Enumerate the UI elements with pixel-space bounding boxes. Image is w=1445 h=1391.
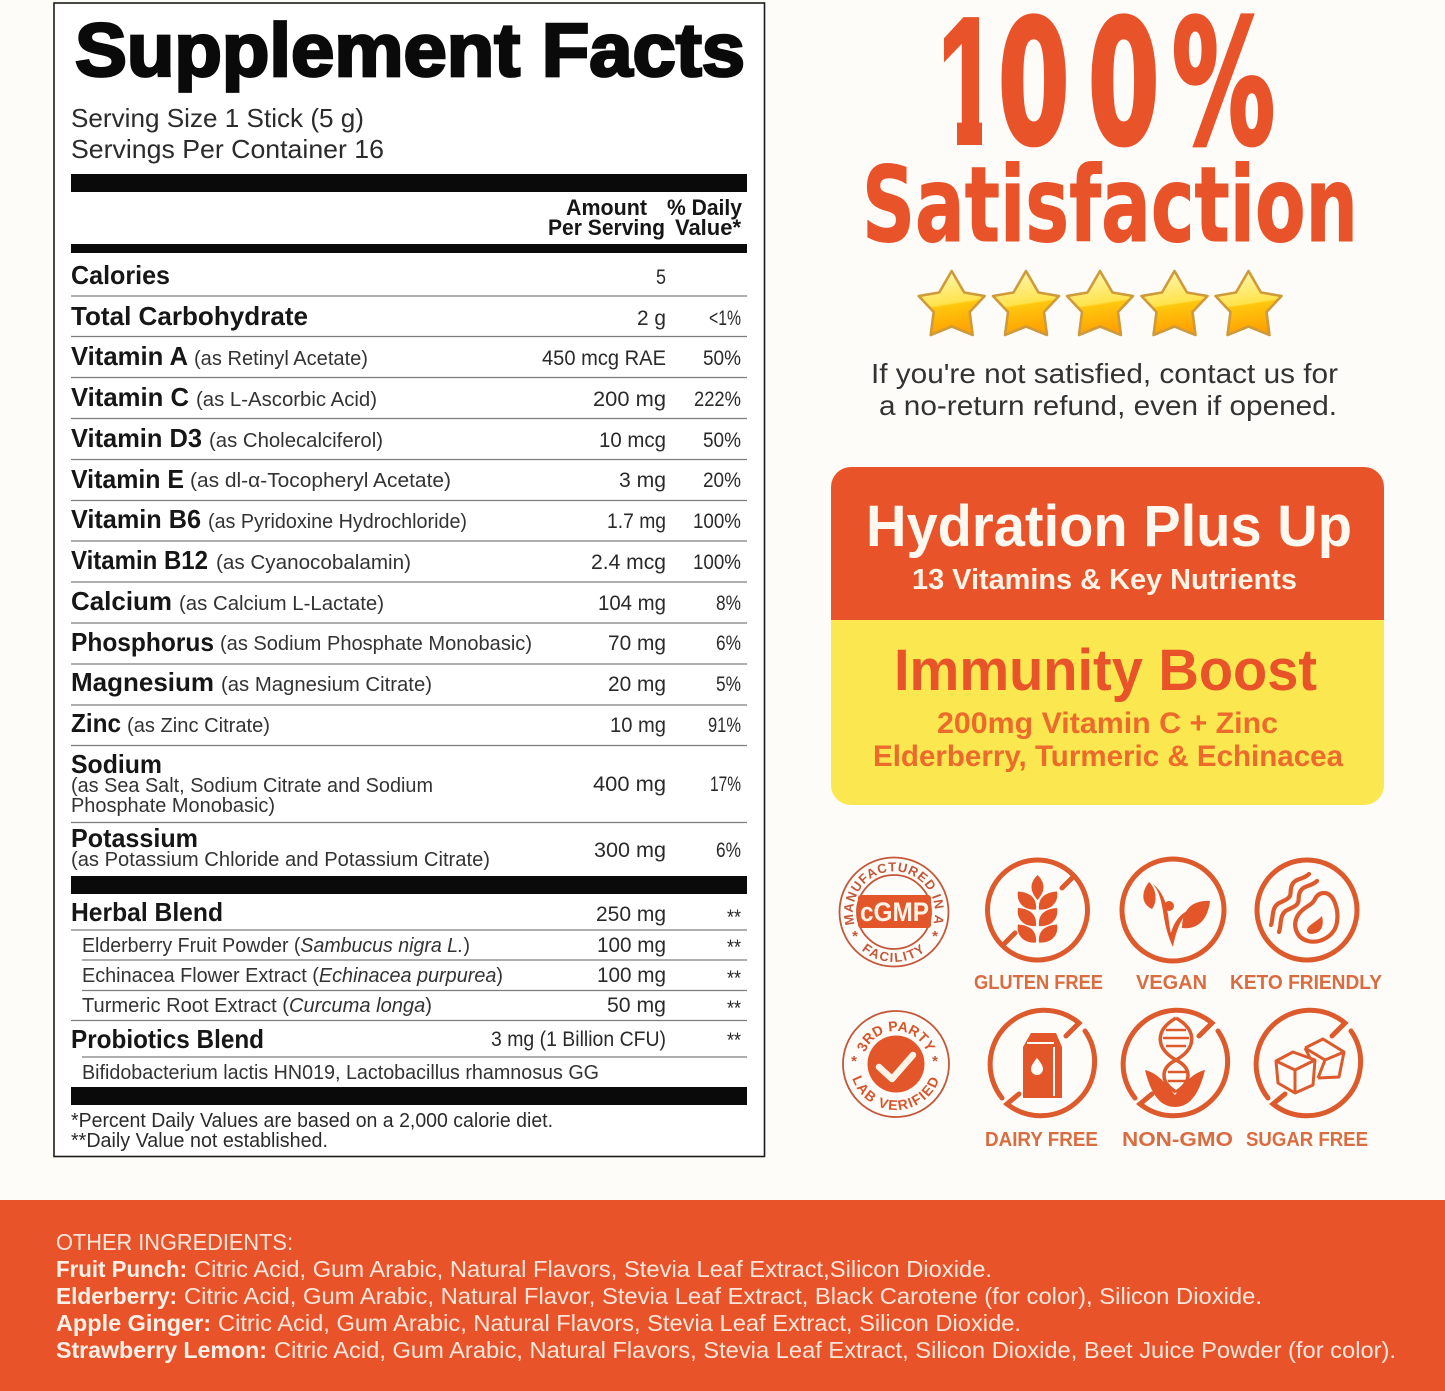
icon: cGMP badge: * [932, 928, 938, 945]
row: vitamin C [71, 382, 741, 412]
row: zinc: (as Zinc Citrate) [127, 715, 270, 737]
panel: supplement facts [54, 3, 764, 1156]
row: probiotics blend: ** [727, 1029, 741, 1052]
column headings: Per Serving [548, 215, 665, 240]
thick divider bar bottom [71, 1087, 747, 1105]
column headings: Amount [566, 195, 648, 220]
row: vitamin A: 50% [703, 347, 741, 370]
row: sodium: (as Sea Salt, Sodium Citrate and Sodium [71, 775, 433, 797]
row: calcium: 8% [716, 592, 741, 615]
ingredients: apple ginger: Apple Ginger: [56, 1310, 211, 1336]
row: sodium: Sodium [71, 749, 162, 779]
row: vitamin B12: 2.4 mcg [591, 551, 666, 574]
row: vitamin A: Vitamin A [71, 341, 188, 371]
thick divider bar header [71, 244, 747, 253]
row: phosphorus: (as Sodium Phosphate Monobasic) [220, 633, 532, 655]
row: vitamin C: (as L-Ascorbic Acid) [196, 389, 377, 411]
serving info [71, 103, 384, 164]
row: vitamin C: 222% [694, 388, 741, 411]
icon: gluten free [988, 860, 1088, 960]
card heading: Hydration Plus Up: Hydration Plus Up [866, 494, 1352, 559]
row: potassium: (as Potassium Chloride and Potassium Citrate) [71, 849, 490, 871]
row: vitamin E [71, 464, 741, 494]
badge labels: GLUTEN FREE [974, 972, 1103, 994]
ingredients: strawberry lemon: Citric Acid, Gum Arabic, Natural Flavors, Stevia Leaf Extract, Silicon Dioxide, Beet Juice Powder (for color). [274, 1337, 1396, 1363]
badge labels: VEGAN [1136, 972, 1207, 994]
card subheading: 13 Vitamins & Key Nutrients [912, 564, 1297, 596]
row: elderberry [82, 934, 741, 959]
row: probiotics blend: 3 mg (1 Billion CFU) [491, 1028, 666, 1051]
row: total carbohydrate [71, 301, 741, 331]
row: potassium: Potassium [71, 823, 198, 853]
row: herbal blend [71, 897, 741, 929]
icon: third party lab verified badge: 3RD PARTY [857, 1021, 936, 1052]
row: total carbohydrate: Total Carbohydrate [71, 301, 308, 331]
panel: other ingredients [0, 1200, 1445, 1391]
row: vitamin B12: 100% [693, 551, 741, 574]
icon: cGMP badge: MANUFACTURED IN A [844, 862, 944, 925]
card details [873, 707, 1343, 773]
serving info: Servings Per Container 16 [71, 134, 384, 164]
row: vitamin D3: (as Cholecalciferol) [209, 430, 383, 452]
row: echinacea [82, 964, 741, 990]
icon: non-GMO [1123, 1010, 1228, 1116]
footnotes [71, 1110, 553, 1152]
icon: sugar free [1256, 1010, 1361, 1116]
row: vitamin B6 [71, 504, 741, 534]
guarantee text: If you're not satisfied, contact us for [871, 358, 1338, 389]
row: phosphorus: Phosphorus [71, 627, 214, 657]
row: vitamin E: Vitamin E [71, 464, 184, 494]
row: elderberry: 100 mg [597, 934, 666, 957]
ingredients heading: OTHER INGREDIENTS: [56, 1229, 293, 1255]
row: vitamin B6: Vitamin B6 [71, 504, 201, 534]
row: vitamin E: (as dl-α-Tocopheryl Acetate) [190, 470, 451, 492]
row: herbal blend: Herbal Blend [71, 897, 223, 927]
row: magnesium [71, 667, 741, 697]
badge labels: NON-GMO [1122, 1129, 1233, 1151]
row: potassium: 6% [716, 839, 741, 862]
row: probiotics blend [71, 1024, 741, 1054]
row: magnesium: (as Magnesium Citrate) [221, 674, 432, 696]
badge labels [974, 972, 1383, 1151]
row: echinacea: 100 mg [597, 964, 666, 987]
column headings: Value* [675, 215, 741, 240]
row: vitamin D3: 50% [703, 429, 741, 452]
badge labels: DAIRY FREE [985, 1129, 1098, 1151]
row: vitamin E: 20% [703, 469, 741, 492]
row: phosphorus: 6% [716, 632, 741, 655]
row: magnesium: 5% [716, 673, 741, 696]
icon: third party lab verified badge: LAB VERIFIED [852, 1075, 938, 1110]
row: calories [71, 260, 666, 290]
row: elderberry: Elderberry Fruit Powder (Sambucus nigra L.) [82, 935, 470, 957]
row: calcium: (as Calcium L-Lactate) [179, 593, 384, 615]
row: vitamin D3 [71, 423, 741, 453]
row: magnesium: Magnesium [71, 667, 214, 697]
row: vitamin B12: (as Cyanocobalamin) [216, 552, 411, 574]
row: calcium [71, 586, 741, 616]
ingredients: elderberry: Citric Acid, Gum Arabic, Natural Flavor, Stevia Leaf Extract, Black Carotene (for color), Silicon Dioxide. [184, 1283, 1262, 1309]
column headings [548, 195, 743, 240]
icon: five stars [919, 271, 1282, 335]
row: vitamin B12 [71, 545, 741, 575]
thick divider bar top [71, 174, 747, 192]
row: vitamin D3: Vitamin D3 [71, 423, 202, 453]
row: potassium: 300 mg [594, 839, 666, 862]
row: calcium: Calcium [71, 586, 172, 616]
row: magnesium: 20 mg [608, 673, 666, 696]
ingredients: apple ginger: Citric Acid, Gum Arabic, Natural Flavors, Stevia Leaf Extract, Silicon Dioxide. [218, 1310, 1021, 1336]
row: turmeric: 50 mg [607, 994, 666, 1017]
row: total carbohydrate: 2 g [637, 307, 666, 330]
ingredients: fruit punch: Fruit Punch: [56, 1256, 187, 1282]
row: probiotics blend: Probiotics Blend [71, 1024, 264, 1054]
row: zinc: 91% [708, 714, 741, 737]
row: elderberry: ** [727, 936, 741, 959]
row: vitamin B12: Vitamin B12 [71, 545, 208, 575]
row: sodium: 400 mg [593, 773, 666, 796]
row: zinc: 10 mg [610, 714, 666, 737]
row: herbal blend: ** [727, 906, 741, 929]
title: Supplement Facts [75, 8, 745, 92]
row: sodium: 17% [710, 773, 741, 796]
icon: cGMP badge: * [852, 928, 858, 945]
icon: cGMP badge: FACILITY [862, 943, 922, 962]
row: vitamin A [71, 341, 741, 371]
row: phosphorus: 70 mg [608, 632, 666, 655]
icon: third party lab verified badge: * [932, 1053, 938, 1070]
row: echinacea: Echinacea Flower Extract (Echinacea purpurea) [82, 965, 503, 987]
icon: keto friendly [1257, 860, 1357, 960]
badge labels: KETO FRIENDLY [1230, 972, 1383, 994]
card details: Elderberry, Turmeric & Echinacea [873, 740, 1343, 773]
column headings: % Daily [667, 195, 743, 220]
row: vitamin C: 200 mg [593, 388, 666, 411]
row: turmeric: Turmeric Root Extract (Curcuma longa) [82, 995, 432, 1017]
row: turmeric [82, 994, 741, 1020]
icon: third party lab verified badge [842, 1010, 950, 1118]
row: phosphorus [71, 627, 741, 657]
ingredients: strawberry lemon: Strawberry Lemon: [56, 1337, 267, 1363]
row: vitamin B6: 1.7 mg [607, 510, 666, 533]
guarantee text: a no-return refund, even if opened. [879, 390, 1337, 421]
icon: vegan [1122, 859, 1224, 961]
icon: cGMP badge [838, 856, 950, 968]
icon: third party lab verified badge: * [851, 1053, 857, 1070]
row: herbal blend: 250 mg [596, 903, 666, 926]
icon: cGMP badge: cGMP [860, 897, 929, 927]
row: calories: 5 [656, 266, 666, 289]
ingredients: fruit punch: Citric Acid, Gum Arabic, Natural Flavors, Stevia Leaf Extract,Silicon Dioxide. [194, 1256, 992, 1282]
row: vitamin B6: (as Pyridoxine Hydrochloride) [208, 511, 467, 533]
row: zinc [71, 708, 741, 738]
row: vitamin B6: 100% [693, 510, 741, 533]
card heading: Immunity Boost: Immunity Boost [894, 638, 1317, 703]
row: echinacea: ** [727, 967, 741, 990]
row: calcium: 104 mg [598, 592, 666, 615]
guarantee text [871, 358, 1338, 421]
panel: product card [831, 467, 1384, 805]
row: vitamin C: Vitamin C [71, 382, 189, 412]
row: calories: Calories [71, 260, 170, 290]
footnotes: *Percent Daily Values are based on a 2,000 calorie diet. [71, 1110, 553, 1132]
row: probiotic strains: Bifidobacterium lactis HN019, Lactobacillus rhamnosus GG [82, 1062, 599, 1084]
row: total carbohydrate: <1% [709, 307, 741, 330]
row: zinc: Zinc [71, 708, 121, 738]
row: vitamin E: 3 mg [619, 469, 666, 492]
footnotes: **Daily Value not established. [71, 1130, 328, 1152]
row: vitamin A: (as Retinyl Acetate) [194, 348, 368, 370]
row dividers [71, 296, 747, 1057]
icon: dairy free [990, 1010, 1095, 1116]
thick divider bar middle [71, 876, 747, 894]
card details: 200mg Vitamin C + Zinc [937, 707, 1278, 740]
row: vitamin D3: 10 mcg [599, 429, 666, 452]
badge labels: SUGAR FREE [1246, 1129, 1368, 1151]
row: vitamin A: 450 mcg RAE [542, 347, 666, 370]
row: sodium [71, 749, 741, 817]
row: sodium: Phosphate Monobasic) [71, 795, 275, 817]
ingredients: elderberry: Elderberry: [56, 1283, 177, 1309]
row: potassium [71, 823, 741, 871]
row: turmeric: ** [727, 997, 741, 1020]
serving info: Serving Size 1 Stick (5 g) [71, 103, 364, 133]
